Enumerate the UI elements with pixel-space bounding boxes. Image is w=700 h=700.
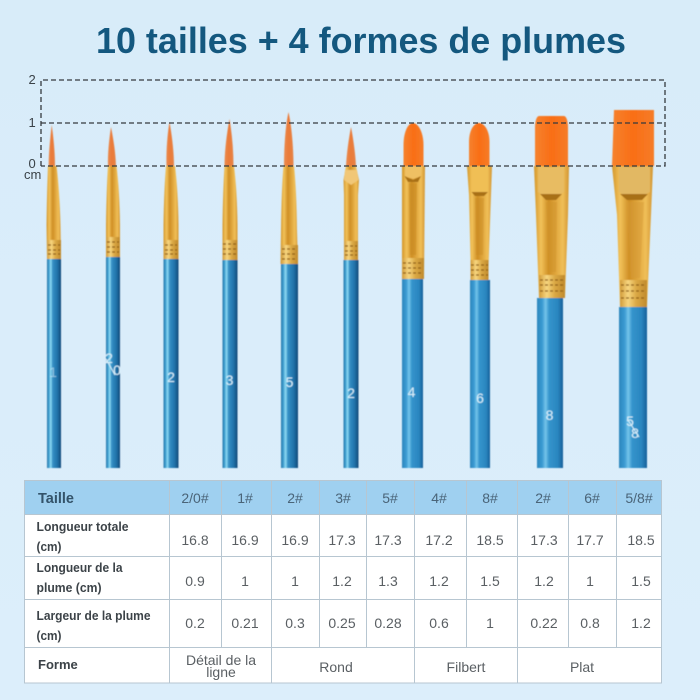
row: longueur de la plume: 1	[586, 573, 594, 589]
size number 5/8: 8	[631, 425, 639, 441]
brush 8 flat	[534, 116, 569, 468]
row: longueur totale: 18.5	[476, 532, 504, 548]
row: forme	[38, 652, 594, 680]
row: longueur de la plume	[36, 560, 651, 595]
size number 2/0: 0	[113, 362, 121, 378]
row: largeur de la plume: 0.2	[185, 615, 205, 631]
row: longueur totale: 18.5	[627, 532, 655, 548]
size number 5: 5	[286, 374, 294, 390]
row: largeur de la plume: 1	[486, 615, 494, 631]
row: longueur de la plume: Longueur de la	[36, 560, 123, 575]
row: largeur de la plume: 0.3	[285, 615, 305, 631]
size number 2: 2	[167, 369, 175, 385]
size number 4: 4	[408, 384, 416, 400]
row: longueur de la plume: 1	[241, 573, 249, 589]
row: longueur de la plume: 1	[291, 573, 299, 589]
table header: 3#	[335, 490, 351, 506]
row: longueur de la plume: 1.2	[332, 573, 352, 589]
row: longueur totale: 17.3	[530, 532, 558, 548]
size number 5/8: 5	[626, 413, 634, 429]
brush 2 detail	[344, 127, 359, 468]
row: forme: ligne	[206, 664, 236, 680]
size number 5/8	[626, 413, 639, 441]
brush 6 filbert	[467, 123, 492, 468]
row: longueur totale: 17.2	[425, 532, 453, 548]
scale unit: cm	[24, 167, 41, 182]
table header: 1#	[237, 490, 253, 506]
brush 1	[46, 125, 61, 468]
brush 3	[222, 119, 238, 468]
size table	[24, 480, 662, 683]
row: longueur de la plume: 1.5	[631, 573, 651, 589]
row: longueur totale: 16.9	[231, 532, 259, 548]
row: longueur totale: 17.3	[374, 532, 402, 548]
row: longueur de la plume: 1.3	[378, 573, 398, 589]
table header: 2#	[287, 490, 303, 506]
size number 2/0: 2	[105, 350, 113, 366]
row: largeur de la plume: 0.28	[374, 615, 402, 631]
row: longueur totale: Longueur totale	[36, 519, 128, 534]
scale label 2: 2	[28, 72, 36, 87]
row: largeur de la plume: (cm)	[36, 628, 62, 643]
row: largeur de la plume: 0.22	[530, 615, 558, 631]
row: longueur totale: 17.3	[328, 532, 356, 548]
row: largeur de la plume: 0.21	[231, 615, 259, 631]
brush 5/8 flat	[612, 110, 654, 468]
size number 6: 6	[476, 390, 484, 406]
table header: 4#	[431, 490, 447, 506]
title: 10 tailles + 4 formes de plumes	[96, 20, 626, 61]
row: largeur de la plume: 0.8	[580, 615, 600, 631]
row: longueur totale: 16.8	[181, 532, 209, 548]
row: longueur de la plume: plume (cm)	[36, 580, 102, 595]
table header: 2#	[535, 490, 551, 506]
scale label 0: 0	[28, 156, 36, 171]
table header: 5/8#	[625, 490, 653, 506]
size number 8: 8	[546, 407, 554, 423]
size number 2: 2	[347, 385, 355, 401]
row: largeur de la plume: 1.2	[631, 615, 651, 631]
row: longueur totale	[36, 519, 655, 554]
size number 2/0	[105, 350, 121, 378]
row: longueur de la plume: 1.2	[429, 573, 449, 589]
measurement scale	[24, 72, 665, 182]
scale label 1: 1	[28, 115, 36, 130]
row: forme: Filbert	[447, 659, 486, 675]
row: longueur totale: (cm)	[36, 539, 62, 554]
size number 1: 1	[49, 364, 57, 380]
table header	[24, 480, 662, 514]
brush 5	[280, 112, 298, 468]
row: forme: Forme	[38, 657, 78, 672]
row: largeur de la plume: 0.25	[328, 615, 356, 631]
row: longueur totale: 16.9	[281, 532, 309, 548]
row: largeur de la plume: Largeur de la plume	[36, 608, 150, 623]
row: largeur de la plume	[36, 608, 651, 643]
brush 2/0	[105, 127, 121, 468]
row: forme: Détail de la	[186, 652, 256, 668]
table header: 5#	[382, 490, 398, 506]
row: forme: Plat	[570, 659, 594, 675]
table header: 2/0#	[181, 490, 209, 506]
size number 3: 3	[226, 372, 234, 388]
table body	[24, 480, 662, 683]
table header: 8#	[482, 490, 498, 506]
row: forme: Rond	[319, 659, 353, 675]
table header: 6#	[584, 490, 600, 506]
table header: Taille	[38, 491, 74, 507]
row: longueur de la plume: 1.2	[534, 573, 554, 589]
row: longueur totale: 17.7	[576, 532, 604, 548]
brush 2 round	[164, 122, 178, 468]
row: longueur de la plume: 1.5	[480, 573, 500, 589]
row: longueur de la plume: 0.9	[185, 573, 205, 589]
brush 4 filbert	[402, 123, 425, 468]
row: largeur de la plume: 0.6	[429, 615, 449, 631]
